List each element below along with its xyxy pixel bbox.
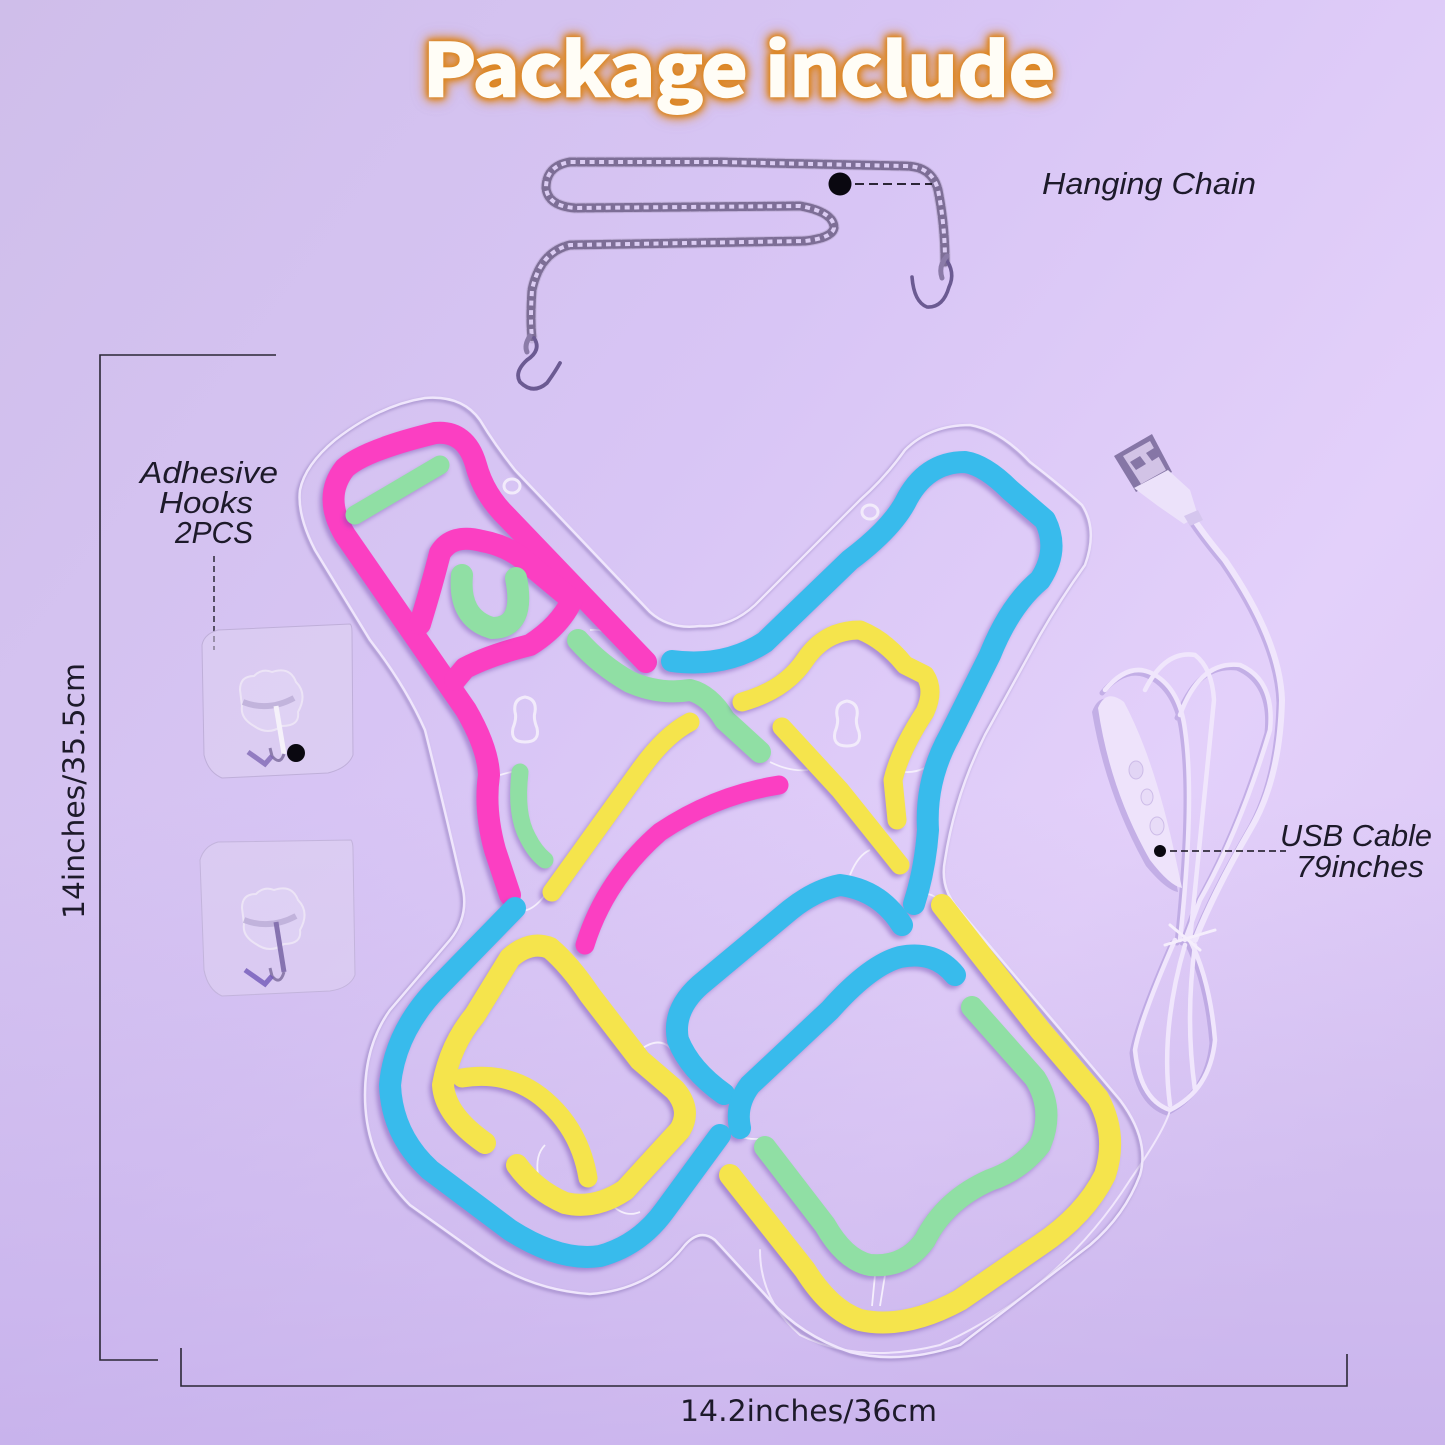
adhesive hooks callout line bbox=[213, 556, 215, 650]
chain hook left bbox=[518, 336, 560, 389]
adhesive hook 2 bbox=[200, 840, 355, 996]
dimension label: width: 14.2inches/36cm bbox=[680, 1394, 937, 1428]
mounting holes bbox=[504, 479, 878, 746]
label: hanging chain: Hanging Chain bbox=[1042, 166, 1256, 201]
hanging chain bbox=[531, 162, 945, 338]
usb cable callout marker bbox=[1154, 845, 1286, 857]
adhesive hook 1 bbox=[202, 624, 353, 778]
neon sign: blue tubes bbox=[390, 462, 1051, 1257]
chain hook right bbox=[912, 256, 952, 307]
neon sign: green tubes bbox=[355, 465, 1046, 1265]
neon sign: yellow tubes bbox=[443, 630, 1110, 1322]
dimension bracket: height bbox=[100, 355, 276, 1360]
dimension bracket: width bbox=[181, 1348, 1347, 1386]
label: usb cable: 79inches bbox=[1296, 849, 1424, 884]
label: adhesive hooks: 2PCS bbox=[174, 515, 253, 550]
chain callout marker bbox=[828, 172, 932, 196]
usb plug bbox=[1114, 434, 1203, 526]
cable shadows bbox=[1102, 513, 1279, 1113]
clear acrylic backing board bbox=[300, 398, 1143, 1357]
dimension label: height: 14inches/35.5cm bbox=[57, 663, 91, 919]
label: usb cable bbox=[1280, 818, 1432, 884]
title: Package include bbox=[423, 12, 1055, 117]
label: adhesive hooks: Hooks bbox=[159, 485, 253, 520]
cable tie bbox=[1165, 925, 1215, 950]
neon sign: pink bottle outline and label bbox=[334, 433, 779, 945]
cable strands bbox=[760, 510, 1282, 1353]
label: adhesive hooks bbox=[138, 455, 278, 550]
connecting wires bbox=[500, 630, 945, 1306]
inline switch bbox=[1092, 696, 1182, 892]
usb cable bbox=[760, 510, 1282, 1353]
label: usb cable: USB Cable bbox=[1280, 818, 1432, 853]
label: adhesive hooks: Adhesive bbox=[138, 455, 278, 490]
